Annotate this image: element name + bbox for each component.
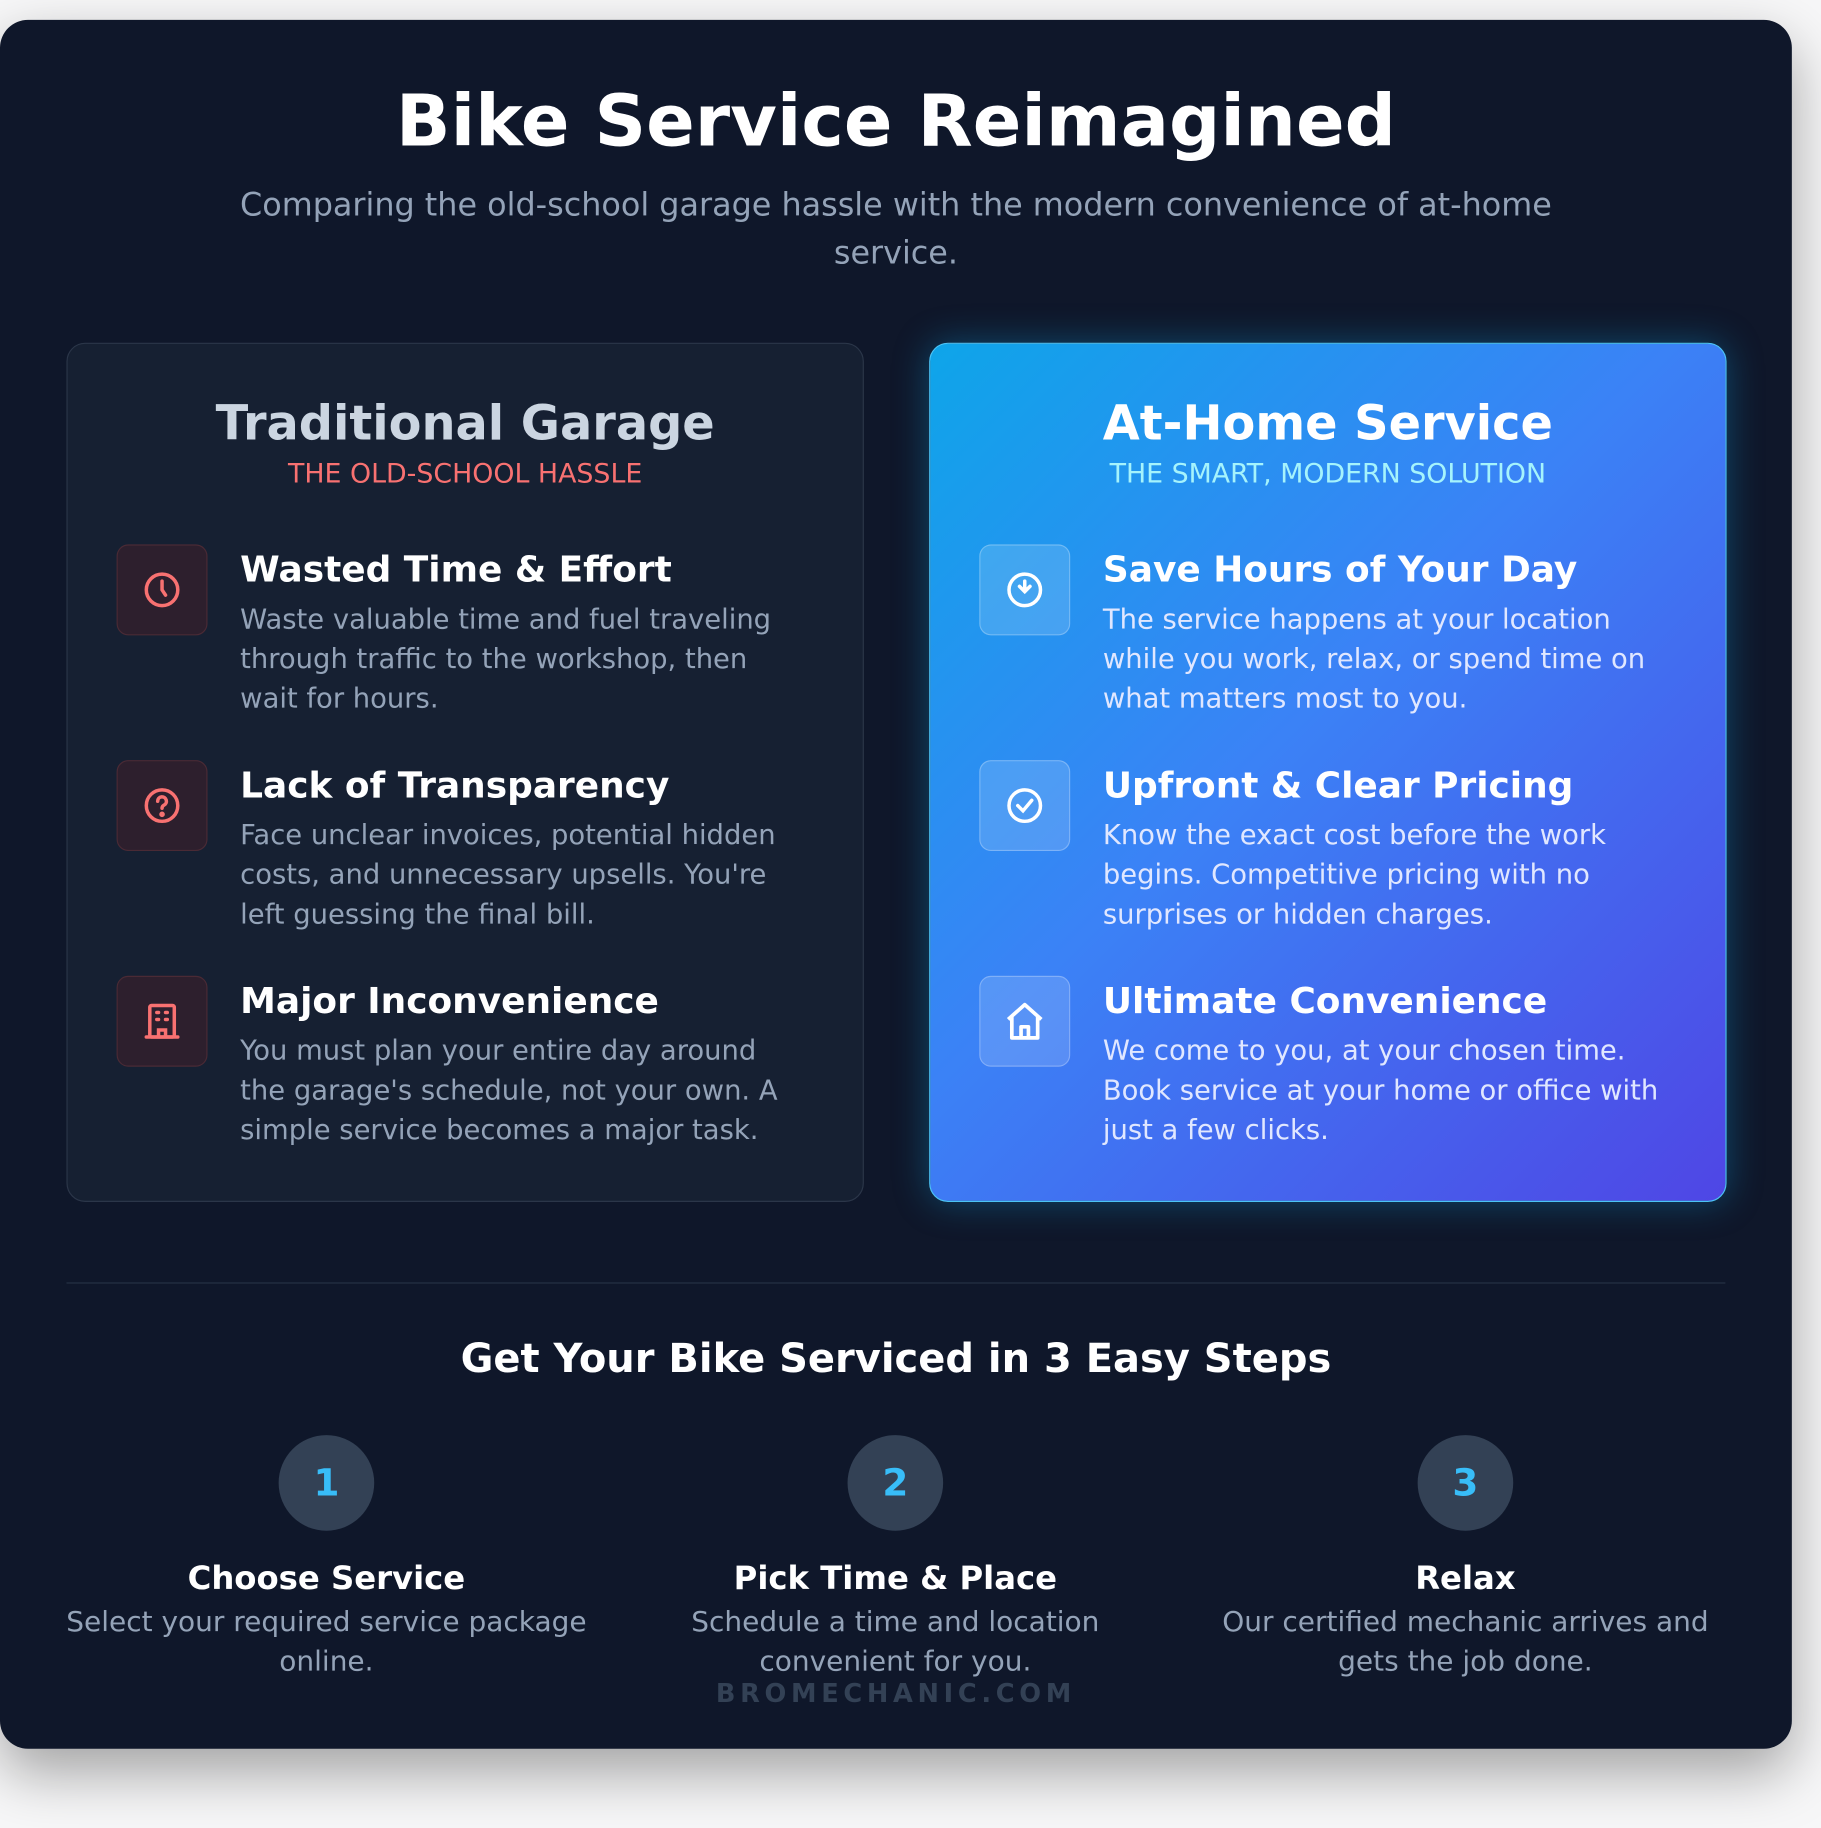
title: Bike Service Reimagined (396, 79, 1396, 163)
step 1 (66, 1435, 587, 1678)
step 2: Schedule a time and location (691, 1605, 1099, 1638)
step 3: 3 (1452, 1461, 1478, 1505)
step 3: Relax (1415, 1559, 1516, 1597)
item: clear pricing (979, 760, 1606, 930)
subtitle: Comparing the old-school garage hassle with the modern convenience of at-home service. (240, 188, 1552, 272)
item: lack of transparency: Lack of Transparency (240, 765, 669, 807)
item: wasted time: Wasted Time & Effort (240, 549, 672, 591)
item: convenience: We come to you, at your chosen time. Book service at your home or office with just a few clicks. (1103, 1034, 1658, 1146)
item: lack of transparency (116, 760, 776, 930)
step 2: convenient for you. (759, 1645, 1031, 1678)
step 2 (691, 1435, 1099, 1678)
item: convenience (979, 976, 1658, 1146)
heading: at-home service: At-Home Service (1103, 395, 1553, 451)
item: major inconvenience: Major Inconvenience (240, 980, 659, 1022)
step 2: Pick Time & Place (734, 1559, 1057, 1597)
icon: clock (117, 544, 208, 635)
step 3: Our certified mechanic arrives and (1222, 1605, 1709, 1638)
watermark: BROMECHANIC.COM (716, 1680, 1076, 1709)
step 1: Select your required service package online. (66, 1605, 587, 1678)
item: lack of transparency: Face unclear invoices, potential hidden costs, and unnecessary upsells. You're left guessing the final bill. (240, 818, 776, 930)
heading: traditional garage: Traditional Garage (216, 395, 715, 451)
icon: question (117, 760, 208, 851)
item: major inconvenience (116, 976, 778, 1146)
subheading: old-school hassle: THE OLD-SCHOOL HASSLE (288, 459, 642, 490)
item: wasted time (116, 544, 771, 715)
item: save hours: The service happens at your location while you work, relax, or spend time on what matters most to you. (1103, 603, 1645, 715)
icon: house (979, 976, 1070, 1067)
panel: at-home service (929, 343, 1727, 1202)
item: major inconvenience: You must plan your entire day around the garage's schedule, not your own. A simple service becomes a major task. (240, 1034, 778, 1146)
panel: traditional garage (66, 343, 864, 1202)
step 2: 2 (882, 1461, 908, 1505)
icon: building (117, 976, 208, 1067)
icon: clock arrow (979, 544, 1070, 635)
subheading: smart modern solution: THE SMART, MODERN SOLUTION (1110, 459, 1546, 490)
step 1: 1 (313, 1461, 339, 1505)
steps heading: Get Your Bike Serviced in 3 Easy Steps (461, 1336, 1331, 1383)
step 1: Choose Service (188, 1559, 465, 1597)
item: convenience: Ultimate Convenience (1103, 980, 1547, 1022)
item: save hours (979, 544, 1645, 715)
item: clear pricing: Know the exact cost before the work begins. Competitive pricing with no surprises or hidden charges. (1103, 818, 1606, 930)
icon: check (979, 760, 1070, 851)
item: clear pricing: Upfront & Clear Pricing (1103, 765, 1573, 807)
step 3 (1222, 1435, 1709, 1678)
step 3: gets the job done. (1338, 1645, 1593, 1678)
item: wasted time: Waste valuable time and fuel traveling through traffic to the workshop, then wait for hours. (240, 603, 771, 715)
item: save hours: Save Hours of Your Day (1103, 549, 1577, 591)
